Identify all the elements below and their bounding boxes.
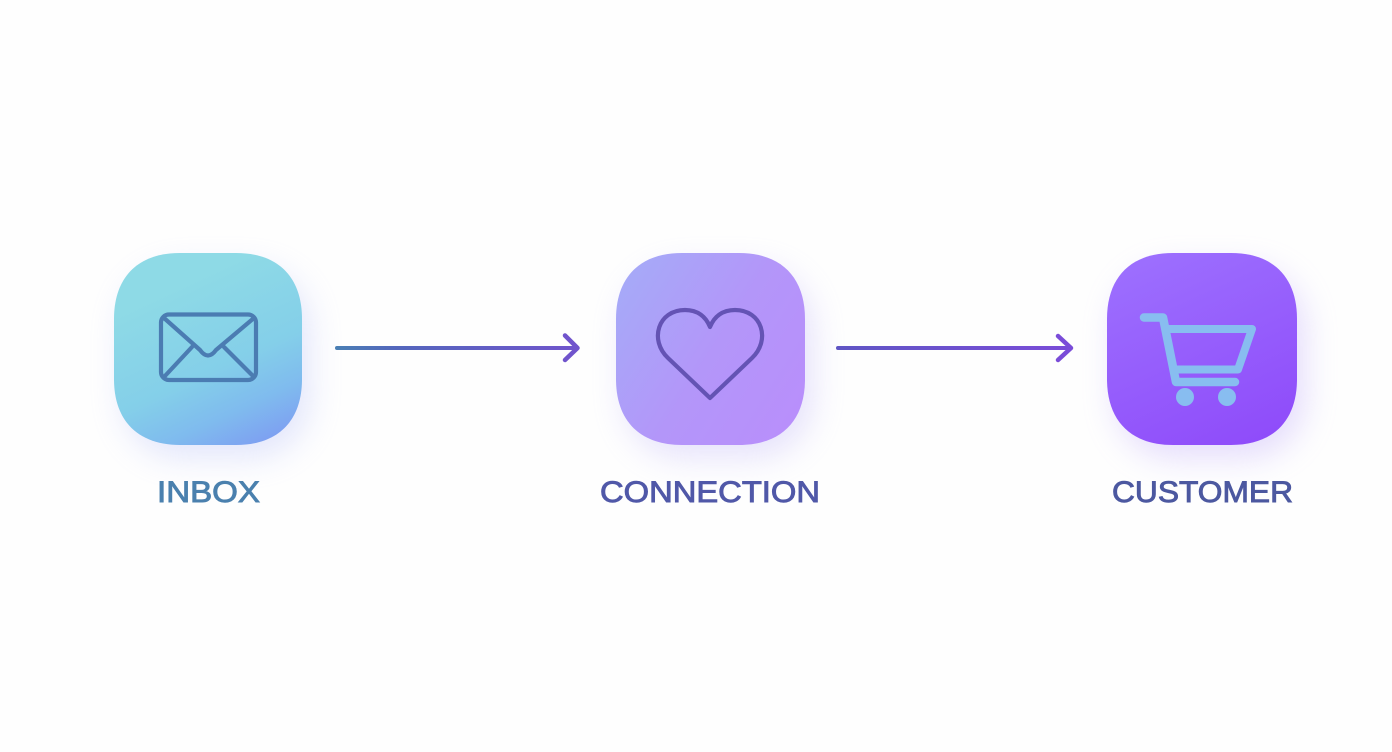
arrow: inbox to connection [337, 336, 578, 360]
panel: customer [1107, 253, 1305, 509]
icon: shopping cart [1144, 318, 1252, 406]
label: connection: CONNECTION [600, 476, 820, 509]
arrow: connection to customer [838, 336, 1071, 360]
panel: inbox [114, 253, 310, 509]
icon: heart [658, 310, 762, 398]
label: inbox: INBOX [157, 476, 260, 509]
panel: connection [600, 253, 820, 509]
label: customer: CUSTOMER [1112, 476, 1293, 509]
inbox tile [114, 253, 302, 445]
icon: envelope [161, 314, 256, 380]
connection tile [616, 253, 805, 445]
customer tile [1107, 253, 1297, 445]
